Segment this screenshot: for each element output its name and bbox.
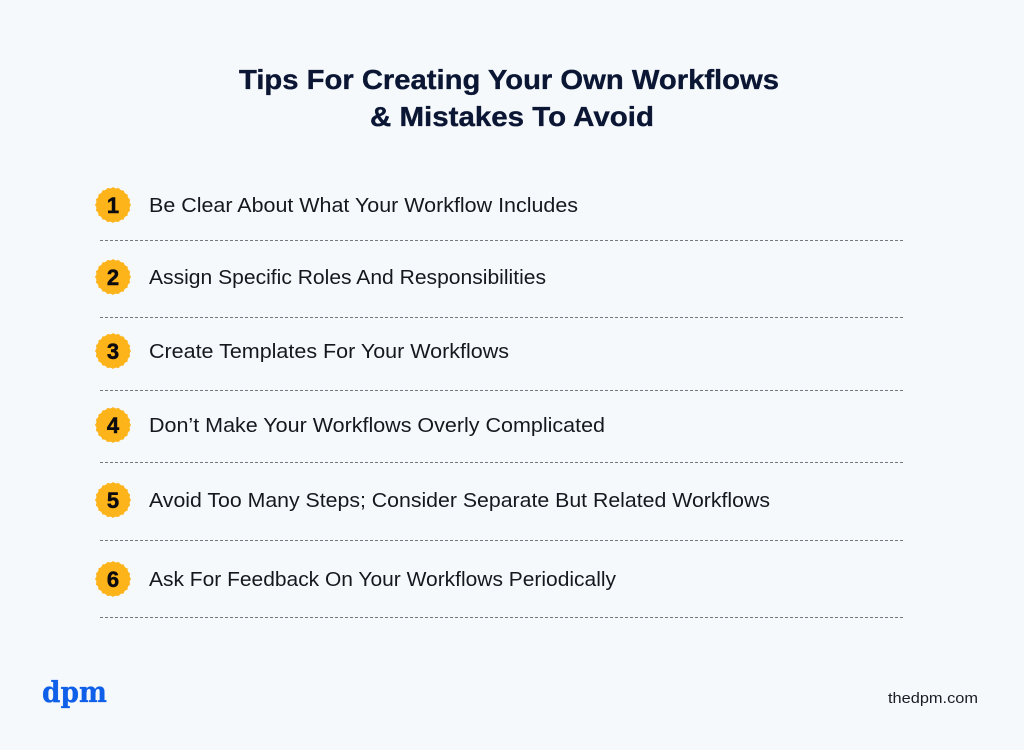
tip 4 bbox=[96, 408, 605, 442]
tip 3 bbox=[96, 334, 509, 368]
tip 6: 6 bbox=[107, 567, 119, 592]
title: Tips For Creating Your Own Workflows bbox=[239, 64, 779, 95]
title: & Mistakes To Avoid bbox=[370, 101, 654, 132]
tip 5: Avoid Too Many Steps; Consider Separate But Related Workflows bbox=[149, 490, 770, 512]
tip 2: 2 bbox=[107, 265, 119, 290]
tip 4: 4 bbox=[107, 413, 120, 438]
tip 3: Create Templates For Your Workflows bbox=[149, 341, 509, 363]
logo: dpm: dpm bbox=[42, 675, 107, 709]
title bbox=[239, 64, 779, 132]
tip 2: Assign Specific Roles And Responsibilities bbox=[149, 267, 546, 289]
tip 6: Ask For Feedback On Your Workflows Periodically bbox=[149, 569, 616, 591]
tip 1 bbox=[96, 188, 578, 222]
tip 6 bbox=[96, 562, 616, 596]
tip 5 bbox=[96, 483, 770, 517]
website url: thedpm.com bbox=[888, 690, 978, 707]
tip 1: Be Clear About What Your Workflow Includes bbox=[149, 195, 578, 217]
tip 2 bbox=[96, 260, 546, 294]
tip 5: 5 bbox=[107, 488, 119, 513]
tip 3: 3 bbox=[107, 339, 119, 364]
tip 4: Don’t Make Your Workflows Overly Complicated bbox=[149, 415, 605, 437]
tip 1: 1 bbox=[107, 193, 119, 218]
